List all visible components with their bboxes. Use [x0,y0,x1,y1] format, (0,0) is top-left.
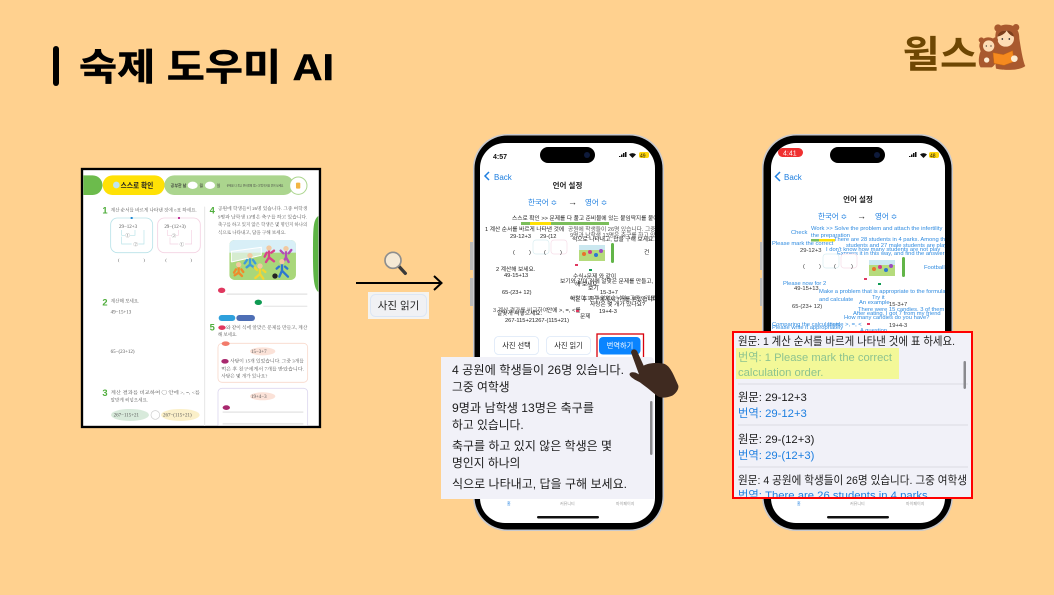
worksheet problems: 축구를 하고 있지 않은 학생은 몇 명인지 하나의 [218,221,307,228]
worksheet problems: 5 [210,323,215,333]
translated overlay: Comparing the calculation [772,322,839,328]
action buttons [494,336,640,354]
row 4 [738,474,966,497]
worksheet problems: 49−15+13 [111,310,132,315]
worksheet problems: 267−(115+21) [163,414,192,419]
phone body [470,134,664,531]
ocr preview: 알맞게 써넣으세요. [497,309,542,317]
worksheet problems: 29−(12+3) [164,225,186,230]
worksheet header: 일 [217,182,221,188]
worksheet problems: 65−(23+12) [111,350,135,355]
row 4: 번역: There are 26 students in 4 parks [738,489,928,502]
worksheet problems: 와 같이 식에 알맞은 문제를 만들고, 계산 [226,324,308,331]
button: read photo [368,292,429,319]
tab bar: 커뮤니티 [850,500,865,506]
panel: recognized text: 명인지 하나의 [452,456,520,470]
ocr preview: 스스로 확인 >> 문제를 다 풀고 준비물에 있는 붙임딱지를 붙여 보 [512,214,665,222]
translated overlay: ) [851,264,853,270]
original and translated row 1: 원문: 1 계산 순서를 바르게 나타낸 것에 표 하세요. [738,334,955,348]
row 3: 번역: 29-(12+3) [738,449,815,462]
worksheet header: 월 [199,182,203,188]
status bar: 4:41 [783,150,797,158]
status bar: 4:57 [493,154,507,161]
button: read photo: 사진 읽기 [378,299,419,312]
nav back: Back [494,173,513,182]
worksheet problems: 9명과 남학생 13명은 축구를 하고 있습니다. [218,213,307,220]
ocr preview: 보기 [588,284,598,292]
ocr preview: 사탕은 몇 개가 있나요? [590,300,645,308]
panel: worksheet page [82,169,320,427]
translated overlay: students and 27 male students are playing [846,243,955,249]
translated overlay: Express it in this way, and find the answer [837,251,945,257]
status bar [493,152,649,159]
row 3 [738,432,815,462]
worksheet problems: ② [172,232,177,239]
worksheet problems: 공원에 학생들이 26명 있습니다. 그중 여학생 [218,205,307,212]
language selector: 영어 ≎ [875,211,897,221]
status bar [778,148,939,158]
translated overlay: After eating, I got 7 from my friend [853,311,941,317]
worksheet problems: ① [125,232,130,239]
translated overlay: Please mark the correct [772,241,834,247]
worksheet header [83,175,307,195]
original and translated row 1: 번역: 1 Please mark the correct [738,351,893,364]
worksheet problems: 먹은 후 친구에게서 7개를 받았습니다. [221,366,304,373]
translated overlay [772,226,955,334]
language selector: → [857,211,866,221]
ocr preview: 3 계산 결과를 비교하여 [493,306,548,314]
language selector [528,198,606,206]
worksheet problems: 알맞게 써넣으세요. [111,396,148,403]
worksheet problems: 19+4−3 [251,395,267,400]
ocr preview: 1 계산 순서를 바르게 나타낸 것에 [485,225,564,233]
panel: recognized text: 하고 있습니다. [452,418,524,432]
worksheet header: 공부한 날 [171,182,187,188]
translated overlay: and calculate [819,297,853,303]
original and translated row 1: calculation order. [738,367,823,379]
worksheet problems: 29−12+3 [119,225,138,230]
worksheet problems: 계산 결과를 비교하여 ◯ 안에 >, =, <를 [111,389,201,396]
original and translated row 1 [738,334,955,379]
home indicator [827,516,889,518]
worksheet problems: 사탕이 15개 있었습니다. 그중 3개를 [230,358,305,365]
language selector: 영어 ≎ [585,197,607,207]
language selector: 한국어 ≎ [818,211,847,221]
status bar: 48 [930,154,936,160]
ocr preview: 15-3+7 [600,290,618,296]
ocr preview: 건 [644,249,649,256]
ocr preview: 공원에 학생들이 26명 있습니다. 그중 여학생 [568,225,673,233]
translated overlay: 19+4-3 [889,323,907,329]
tab bar: 홈 [507,500,511,506]
panel: recognized text: 그중 여학생 [452,380,510,394]
worksheet problems: ( [118,258,120,263]
tab bar: 홈 [797,500,801,506]
ocr preview: 49-15+13 [504,273,528,279]
worksheet header: 스스로 확인 [121,181,154,190]
translated overlay: Check [791,230,808,236]
soccer illustration [229,240,296,280]
icon: bears reading [979,24,1025,70]
phone body [760,134,953,531]
translated overlay: How many candies do you have? [844,315,930,321]
translated overlay: Please now for 2 [783,281,826,287]
worksheet problems: 계산해 보세요. [111,298,139,305]
arrow [356,276,442,290]
ocr preview: 29-12+3 [510,234,531,240]
worksheet header: 문제를 다 풀고 준비물에 있는 붙임딱지를 붙여 보세요 [227,184,284,188]
translated overlay: I don't know how many students are not play [826,247,940,253]
translated overlay: There were 15 candies. 3 of them [858,307,945,313]
ocr preview: 먹은 후 친구에게서 7개를 받았습니다. [570,295,660,303]
home indicator [537,516,599,518]
red highlight box [597,334,644,359]
ocr preview: 29-(12 [540,234,556,240]
translated overlay: Work >> Solve the problem and attach the infertility [811,226,942,232]
ocr preview: ) [529,250,531,256]
ocr preview: 보기와 같이 식에 알맞은 문제를 만들고, 계산 [560,277,666,285]
worksheet problems: 사탕은 몇 개가 있나요? [221,372,267,379]
phone 1 [441,134,678,531]
worksheet problems: ② [133,241,138,248]
row 2: 번역: 29-12+3 [738,407,807,420]
translated overlay: 29-12+3 [800,248,821,254]
ocr preview: 해 보세요. [575,280,600,288]
ocr preview: 19+4-3 [599,309,617,315]
translated overlay: A question [860,328,887,334]
translated overlay: ( [834,264,836,270]
highlight [736,348,899,379]
ocr preview: 사탕이 15개 있었습니다. 그중 3개를 [570,294,655,302]
worksheet problems: 3 [102,388,108,398]
worksheet problems: 267−115+21 [114,414,140,419]
translated overlay: Try it [872,295,885,301]
translated overlay: An example [859,300,890,306]
worksheet problems: 15−3+7 [251,350,267,355]
language selector: 한국어 ≎ [528,197,557,207]
panel: recognized text [441,357,654,499]
row 4: 원문: 4 공원에 학생들이 26명 있습니다. 그중 여학생 [738,473,967,487]
title: 숙제 도우미 AI [79,47,334,88]
translated overlay: 49-15+13 [794,286,819,292]
row 3: 원문: 29-(12+3) [738,432,815,446]
tab bar [797,501,924,506]
translated overlay: the preparation [811,233,850,239]
panel: recognized text: 4 공원에 학생들이 26명 있습니다. [452,363,624,377]
ocr preview: ( [544,250,546,256]
language selector: → [568,197,577,207]
worksheet problems: 식으로 나타내고, 답을 구해 보세요. [218,229,286,236]
worksheet problems: ① [180,241,185,248]
worksheet problems [102,205,318,426]
row 2 [738,390,807,420]
ocr preview: 식으로 나타내고, 답을 구해 보세요. [572,235,655,243]
worksheet problems: 계산 순서를 바르게 나타낸 것에 ○표 하세요. [111,206,197,213]
worksheet problems: ) [190,258,192,263]
panel: recognized text: 축구를 하고 있지 않은 학생은 몇 [452,439,612,453]
ocr preview: ) [560,250,562,256]
ocr preview: 수식+문제 와 같이 [573,272,616,280]
tab bar: 마이페이지 [616,500,635,506]
ocr preview: 267-115+21267-(115+21) [505,318,569,324]
ocr preview: 안에 >, =, <를 [547,306,581,314]
red outline [733,332,972,498]
action buttons: 번역하기 [607,341,633,350]
panel: recognized text: 식으로 나타내고, 답을 구해 보세요. [452,477,627,491]
tab bar: 커뮤니티 [560,500,575,506]
logo wordmark: 윌스 [903,33,977,75]
ocr preview: 2 계산해 보세요. [496,265,536,273]
panel: recognized text: 9명과 남학생 13명은 축구를 [452,401,594,415]
translated overlay: 15-3+7 [889,302,907,308]
ocr preview: 문제 [580,312,590,320]
nav back [485,172,513,182]
nav back: Back [784,173,803,182]
status bar: 49 [640,154,646,160]
row 2: 원문: 29-12+3 [738,390,807,404]
action buttons: 사진 읽기 [554,341,583,350]
worksheet problems: 1 [102,205,108,215]
translated overlay: ) [819,264,821,270]
translated overlay: 65-(23+ 12) [792,304,822,310]
worksheet problems: 2 [102,297,108,307]
translated overlay: Make a problem that is appropriate to the formula [819,289,946,295]
action buttons: 사진 선택 [502,341,531,350]
worksheet problems: 해 보세요. [218,331,237,338]
worksheet problems: 4 [210,205,216,215]
translated overlay: Please write it appropriately [772,325,843,331]
phone 2 [733,134,972,531]
tab bar [507,501,634,506]
panel: translation results [733,332,972,502]
icon: magnifying glass [385,252,405,273]
ocr preview: 9명과 남학생 13명은 축구를 하고 있습니다 [570,231,672,239]
translated overlay: ( [803,264,805,270]
translated overlay: Inside >, =, < [828,322,862,328]
worksheet problems: ) [143,258,145,263]
language selector [818,212,896,220]
screen title: 언어 설정 [843,194,873,204]
logo [903,24,1025,75]
translated overlay: There are 28 students in 4 parks. Among them [834,237,953,243]
ocr preview: 65-(23+ 12) [502,290,532,296]
nav back [776,172,803,182]
ocr preview: ( [513,250,515,256]
worksheet problems: ( [165,258,167,263]
ocr preview [485,215,655,323]
tab bar: 마이페이지 [906,500,925,506]
translated overlay: Football [924,265,945,271]
screen title: 언어 설정 [553,180,582,190]
icon: pointing hand [630,349,678,398]
